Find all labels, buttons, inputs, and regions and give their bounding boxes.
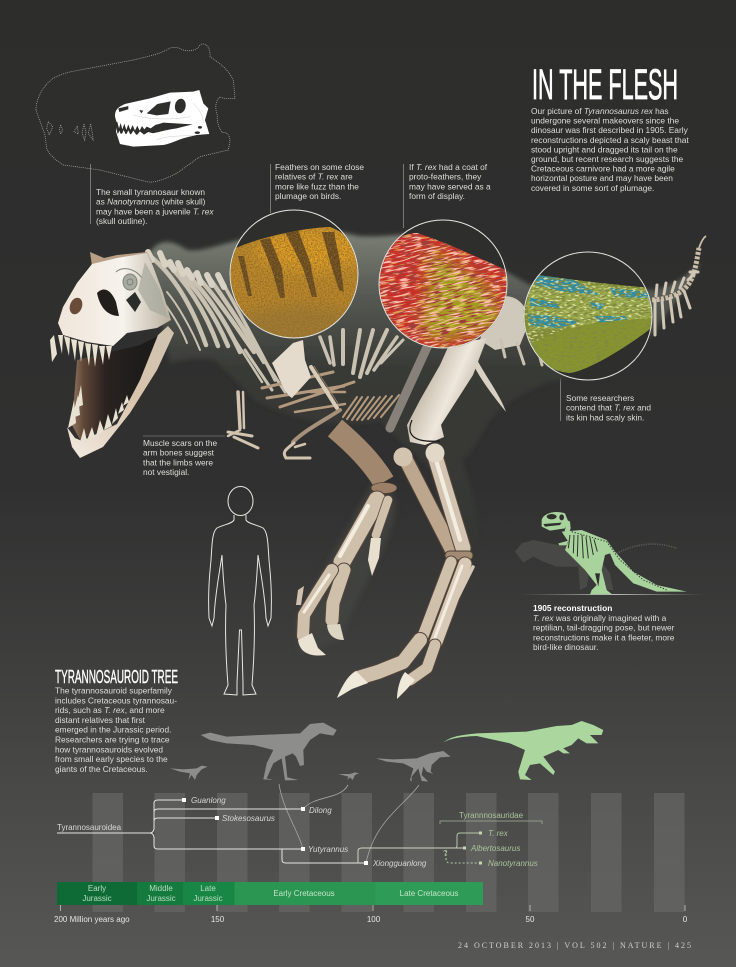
tree intro text: how tyrannosauroids evolved	[55, 744, 163, 754]
circle: fuzz feather texture	[230, 210, 358, 338]
era bands	[57, 882, 137, 905]
skeleton gaps	[568, 532, 667, 590]
1905 reconstruction text: reconstructions make it a fleeter, more	[533, 632, 675, 642]
note: proto-feathers: If T. rex had a coat of	[409, 162, 487, 172]
intro text: stood upright and dragged its tail on the	[531, 144, 678, 154]
skeleton: neck ribs and torso ribs	[148, 252, 403, 420]
tree intro text: giants of the Cretaceous.	[55, 764, 148, 774]
era labels: Jurassic	[146, 894, 176, 903]
note: fuzz feathers: relatives of T. rex are	[275, 172, 353, 182]
intro text: Our picture of Tyrannosaurus rex has	[531, 106, 669, 116]
note: proto-feathers: form of display.	[409, 191, 465, 201]
tree nodes	[182, 798, 368, 865]
nostril	[67, 296, 85, 316]
skeleton: arms	[228, 392, 340, 458]
era labels: Jurassic	[193, 894, 223, 903]
era labels: Jurassic	[82, 894, 112, 903]
phylogenetic tree: Guanlong	[191, 796, 226, 805]
intro text: undergone several makeovers since the	[531, 116, 679, 126]
silhouette: T. rex	[443, 721, 603, 780]
phylogenetic tree: Yutyrannus	[308, 845, 348, 854]
upper teeth	[50, 335, 112, 367]
silhouette: Guanlong	[170, 766, 208, 780]
era labels: Early	[88, 884, 106, 893]
tree intro text: The tyrannosauroid superfamily	[55, 686, 173, 696]
1905 reconstruction skeletons	[515, 512, 707, 595]
skeleton: near leg	[337, 338, 487, 699]
note: scaly skin: Some researchers	[566, 393, 634, 403]
note: nanotyrannus: as Nanotyrannus (white skull)	[96, 197, 205, 207]
human outline	[209, 486, 271, 695]
phylogenetic tree: Tyrannnosauridae	[459, 811, 524, 820]
era labels: Middle	[149, 884, 173, 893]
upper skull	[58, 253, 171, 346]
era labels: Late	[200, 884, 216, 893]
lower teeth	[68, 385, 129, 442]
intro text: reconstructions depicted a scaly beast that	[531, 135, 689, 145]
skeleton: hips and tail	[470, 236, 706, 412]
pubis spike	[470, 358, 506, 412]
phylogenetic tree: Albertosaurus	[470, 844, 520, 853]
axis labels: 50	[526, 915, 535, 924]
axis labels: 100	[367, 915, 381, 924]
tree heading: TYRANNOSAUROID TREE	[55, 667, 178, 687]
note: scaly skin: contend that T. rex and	[566, 403, 651, 413]
1905 reconstruction text: reptilian, tail-dragging pose, but newer	[533, 623, 675, 633]
tree intro text: emerged in the Jurassic period.	[55, 725, 171, 735]
gastralia	[262, 372, 399, 420]
phylogenetic tree: ?	[443, 849, 448, 858]
tail vertebrae	[652, 248, 699, 300]
mouth interior	[72, 335, 160, 440]
intro text: ground, but recent research suggests the	[531, 154, 683, 164]
silhouette: Yutyrannus	[201, 723, 337, 780]
tree intro text: distant relatives that first	[55, 715, 146, 725]
phylogenetic tree: Xiongguanlong	[372, 859, 427, 868]
tree labels: Tyrannosauroidea	[57, 823, 122, 832]
note: muscle scars: arm bones suggest	[143, 448, 215, 458]
silhouette connector lines	[279, 784, 419, 863]
geologic timeline	[54, 882, 688, 924]
crest	[90, 252, 152, 285]
tree branches	[57, 800, 465, 863]
green skeleton	[542, 512, 687, 595]
far femur behind	[390, 345, 428, 428]
silhouettes	[170, 721, 603, 782]
body shade	[150, 231, 700, 655]
note: muscle scars: that the limbs were	[143, 457, 213, 467]
cheek opening	[126, 292, 141, 312]
footer: 24 OCTOBER 2013 | VOL 502 | NATURE | 425	[458, 941, 691, 950]
lower jaw	[67, 326, 174, 458]
skeleton: far leg	[296, 428, 397, 656]
skull outline (T. rex)	[36, 44, 235, 182]
intro text: Cretaceous carnivore had a more agile	[531, 164, 675, 174]
far leg halo	[295, 480, 395, 655]
intro text: covered in some sort of plumage.	[531, 183, 654, 193]
note: proto-feathers: may have served as a	[409, 181, 491, 191]
axis ticks	[60, 905, 685, 911]
white skull (Nanotyrannus)	[115, 90, 209, 147]
ground line	[520, 593, 707, 596]
note: proto-feathers: proto-feathers, they	[409, 172, 482, 182]
silhouette: Dilong	[338, 772, 359, 780]
near femur	[407, 338, 487, 445]
note: fuzz feathers: Feathers on some close	[275, 162, 364, 172]
note: nanotyrannus: may have been a juvenile T. rex	[96, 206, 214, 216]
tree intro text: includes Cretaceous tyrannosau-	[55, 695, 177, 705]
eye socket	[116, 269, 142, 290]
axis labels: 150	[211, 915, 225, 924]
note: nanotyrannus: (skull outline).	[96, 216, 147, 226]
note: fuzz feathers: more like fuzz than the	[275, 181, 359, 191]
note: muscle scars: not vestigial.	[143, 467, 189, 477]
spines	[148, 252, 224, 287]
note: muscle scars: Muscle scars on the	[143, 438, 218, 448]
axis labels: 0	[683, 915, 688, 924]
axis labels: 200 Million years ago	[54, 915, 130, 924]
note: nanotyrannus: The small tyrannosaur known	[96, 187, 205, 197]
phylogenetic tree	[57, 796, 542, 868]
circle: proto-feather texture	[378, 220, 508, 348]
skeleton: shoulder girdle	[272, 340, 339, 408]
ghost skeleton	[515, 540, 677, 590]
phylogenetic tree: Nanotyrannus	[488, 859, 538, 868]
timeline background bars	[92, 793, 684, 912]
era labels: Early Cretaceous	[273, 889, 335, 898]
circle: scaly skin texture	[524, 252, 652, 380]
tree intro text: rids, such as T. rex, and more	[55, 705, 165, 715]
intro text: horizontal posture and may have been	[531, 173, 673, 183]
leader lines	[90, 164, 560, 436]
note: scaly skin: its kin had scaly skin.	[566, 412, 644, 422]
tree intro text: from small early species to the	[55, 754, 168, 764]
intro text: dinosaur was first described in 1905. Early	[531, 125, 689, 135]
note: fuzz feathers: plumage on birds.	[275, 191, 341, 201]
1905 reconstruction text: 1905 reconstruction	[533, 603, 612, 613]
axis labels	[54, 915, 688, 924]
phylogenetic tree: Stokesosaurus	[222, 814, 275, 823]
1905 reconstruction text: T. rex was originally imagined with a	[533, 613, 666, 623]
era labels	[82, 884, 458, 903]
era labels: Late Cretaceous	[400, 889, 458, 898]
T. rex skull	[50, 252, 174, 458]
phylogenetic tree: Dilong	[309, 806, 332, 815]
tree intro text: Researchers are trying to trace	[55, 734, 170, 744]
antorbital opening	[97, 290, 119, 316]
phylogenetic tree: T. rex	[488, 829, 509, 838]
1905 reconstruction text: bird-like dinosaur.	[533, 642, 598, 652]
silhouette: Xiongguanlong	[376, 751, 451, 782]
